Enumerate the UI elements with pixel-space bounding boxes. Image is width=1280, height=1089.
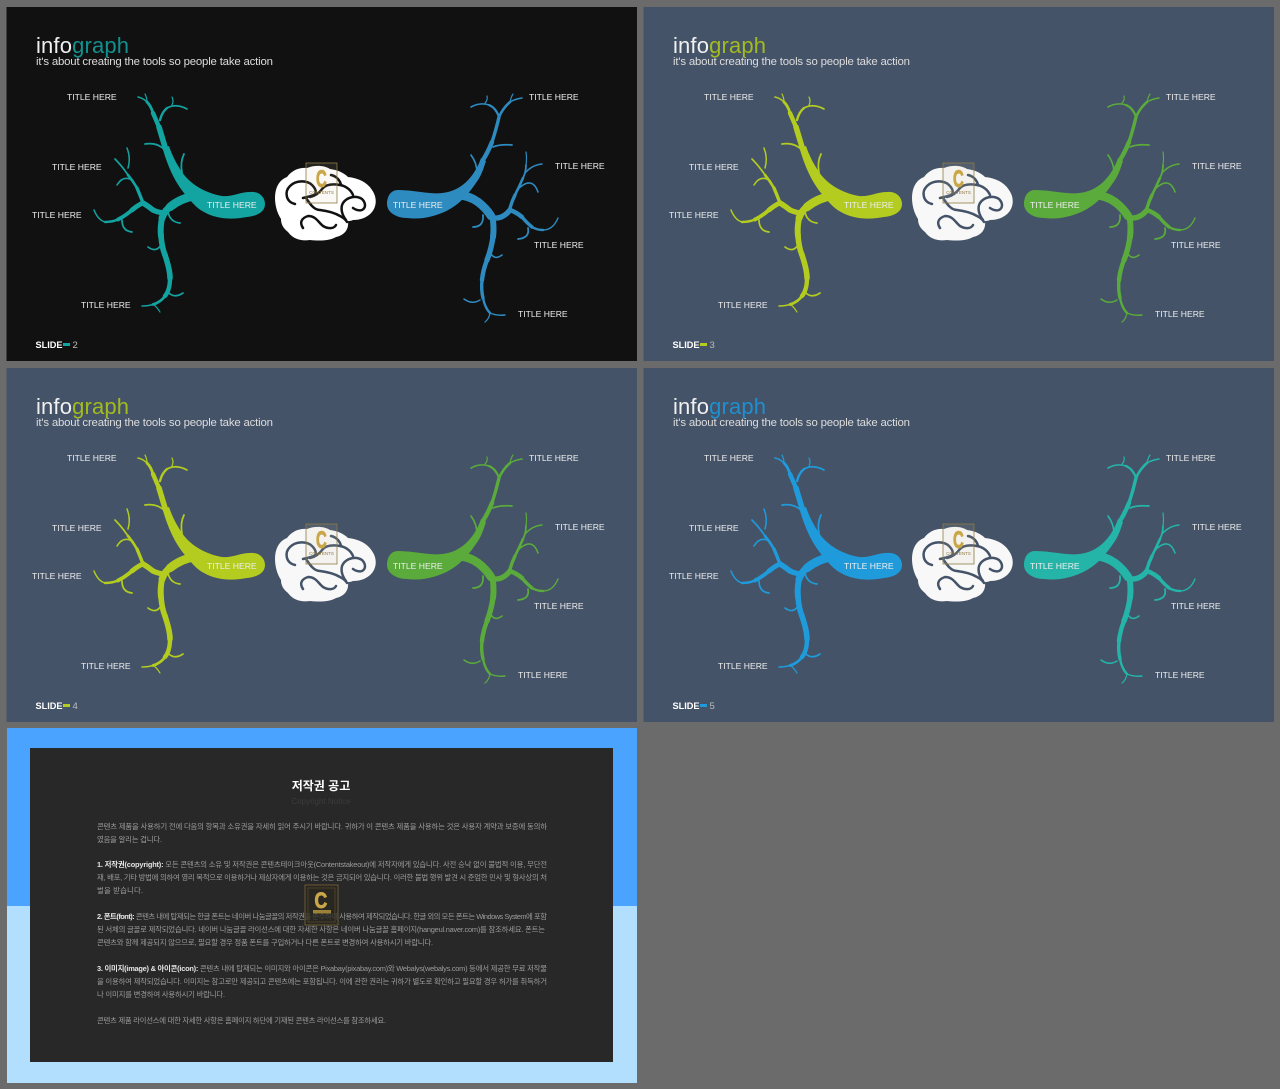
text block: copyright: 1. 저작권(copyright): 모든 콘텐츠의 소유 및 저작권은 콘텐츠테이크아웃(Contentstakeout)에 저작자에게 있습니다. 사전 승낙 없이 불법적 이용, 무단전 [97,860,547,869]
labels: right titles: TITLE HERE [393,200,443,210]
icon: brain [275,166,376,241]
watermark badge [943,163,974,203]
labels: right titles: TITLE HERE [1030,200,1080,210]
watermark badge: C [953,528,964,554]
heading: infograph: infograph [673,33,766,58]
text block: copyright: 재, 배포, 기타 방법에 의하여 영리 목적으로 이용하거나 제삼자에게 이용하는 것은 금지되어 있습니다. 이러한 불법 행위 발견 시 준엄한 민사 및 형사상의 처 [97,873,547,882]
text block: copyright: 벌을 받습니다. [97,886,143,895]
slide number: 5 [710,701,715,712]
labels: right titles: TITLE HERE [529,92,579,102]
labels: left titles [32,453,257,671]
labels: left titles: TITLE HERE [689,162,739,172]
panel: copyright notice slide [7,728,637,1083]
text block: image and icon: 을 이용하여 제작되었습니다. 이미지는 참고로만 제공되고 콘텐츠에는 포함됩니다. 이에 관한 권리는 귀하가 별도로 확인하고 필요할 경우 허가를 취득하거 [97,977,547,986]
labels: left titles: TITLE HERE [704,453,754,463]
slide number: SLIDE [672,340,700,350]
watermark badge: C [316,528,327,554]
chart: right branch tree [387,94,558,322]
labels: left titles [32,92,257,310]
text block: font: 2. 폰트(font): 콘텐츠 내에 탑재되는 한글 폰트는 네이버 나눔글꼴의 저작권을 준수하여 사용하여 제작되었습니다. 한글 외의 모든 폰트는 Windows System에 포함 [97,912,547,921]
text block: image and icon: 나 이미지를 변경하여 사용하시기 바랍니다. [97,990,225,999]
labels: left titles: TITLE HERE [844,200,894,210]
labels: left titles: TITLE HERE [669,210,719,220]
subheading: copyright notice: Copyright Notice [291,797,351,806]
labels: left titles: TITLE HERE [704,92,754,102]
labels: left titles: TITLE HERE [67,92,117,102]
labels: right titles: TITLE HERE [555,522,605,532]
text block: image and icon: 3. 이미지(image) & 아이콘(icon): 콘텐츠 내에 탑재되는 이미지와 아이콘은 Pixabay(pixabay.com)와 Webalys(webalys.com) 등에서 제공한 무료 저작물 [97,964,547,973]
labels: right titles [393,92,605,319]
heading: infograph: infograph [673,394,766,419]
slide number: SLIDE [36,701,63,711]
text block: introduction [97,822,547,844]
chart: right branch tree [1024,94,1195,322]
panel: slide 4, lime on slate [6,368,637,722]
slide number: 2 [72,340,78,351]
slide number: SLIDE [36,340,63,350]
labels: right titles: TITLE HERE [518,670,568,680]
subtitle: it's about creating the tools so people take action [36,56,273,68]
labels: left titles [669,92,894,310]
text block: image and icon [97,964,547,999]
labels: left titles: TITLE HERE [718,300,768,310]
heading: infograph: infograph [36,394,129,419]
slide number: SLIDE [672,701,700,711]
text block: font: 콘텐츠와 함께 제공되지 않으므로, 필요할 경우 정품 폰트를 구입하거나 다른 폰트로 변경하여 사용하시기 바랍니다. [97,938,433,947]
icon: brain [912,527,1013,602]
slide number [36,340,78,351]
labels: right titles: TITLE HERE [1166,453,1216,463]
text block: font [97,912,547,947]
labels: left titles: TITLE HERE [689,523,739,533]
labels: right titles: TITLE HERE [555,161,605,171]
panel: slide 3, lime on slate [644,7,1274,361]
slide number: 4 [72,701,78,712]
labels: right titles: TITLE HERE [534,240,584,250]
labels: right titles: TITLE HERE [529,453,579,463]
chart: right branch tree [1024,455,1195,683]
labels: right titles: TITLE HERE [1030,561,1080,571]
watermark badge [306,524,337,564]
icon: brain [275,527,376,602]
text block: introduction: 였음을 알리는 겁니다. [97,835,162,844]
slide number: 3 [710,340,715,351]
labels: right titles [1030,453,1242,680]
labels: left titles: TITLE HERE [67,453,117,463]
labels: right titles: TITLE HERE [1171,240,1221,250]
icon: brain [912,166,1013,241]
labels: right titles: TITLE HERE [393,561,443,571]
watermark badge: CONTENTS [309,551,334,556]
labels: right titles: TITLE HERE [1155,309,1205,319]
labels: left titles: TITLE HERE [207,200,257,210]
text block: font: 된 서체의 글꼴로 제작되었습니다. 네이버 나눔글꼴 라이선스에 대한 자세한 사항은 네이버 나눔글꼴 홈페이지(hangeul.naver.com)를 참조하세요. 폰트는 [97,925,545,934]
subtitle: it's about creating the tools so people take action [36,417,273,429]
slide number [672,340,715,351]
labels: right titles: TITLE HERE [1192,522,1242,532]
watermark badge: CONTENTS [946,190,971,195]
labels: right titles [1030,92,1242,319]
labels: left titles: TITLE HERE [32,210,82,220]
chart: left branch tree [731,455,902,673]
labels: left titles: TITLE HERE [844,561,894,571]
subtitle: it's about creating the tools so people take action [673,56,910,68]
labels: left titles: TITLE HERE [207,561,257,571]
panel: slide 5, blue on slate [644,368,1274,722]
labels: right titles: TITLE HERE [518,309,568,319]
heading: copyright notice: 저작권 공고 [292,778,350,793]
slide number [36,701,78,712]
watermark badge: C [316,167,327,193]
labels: left titles: TITLE HERE [32,571,82,581]
watermark badge: C [953,167,964,193]
chart: left branch tree [94,94,265,312]
labels: right titles: TITLE HERE [1166,92,1216,102]
heading: infograph: infograph [36,33,129,58]
watermark badge: CONTENTS [946,551,971,556]
text block: introduction: 콘텐츠 제품을 사용하기 전에 다음의 항목과 소유권을 자세히 읽어 주시기 바랍니다. 귀하가 이 콘텐츠 제품을 사용하는 것은 사용자 계약과 보증에 동의하 [97,822,547,831]
slide number [672,701,715,712]
labels: left titles: TITLE HERE [718,661,768,671]
labels: right titles: TITLE HERE [1171,601,1221,611]
watermark badge: CONTENTS [309,190,334,195]
subtitle: it's about creating the tools so people take action [673,417,910,429]
labels: left titles: TITLE HERE [81,300,131,310]
chart: right branch tree [387,455,558,683]
watermark badge [306,163,337,203]
text block: license note: 콘텐츠 제품 라이선스에 대한 자세한 사항은 홈페이지 하단에 기재된 콘텐츠 라이선스를 참조하세요. [97,1016,386,1025]
chart: left branch tree [94,455,265,673]
labels: left titles [669,453,894,671]
labels: left titles: TITLE HERE [81,661,131,671]
panel: slide 2, black [6,7,637,361]
chart: left branch tree [731,94,902,312]
labels: right titles [393,453,605,680]
watermark badge [943,524,974,564]
labels: right titles: TITLE HERE [1192,161,1242,171]
labels: left titles: TITLE HERE [669,571,719,581]
labels: right titles: TITLE HERE [1155,670,1205,680]
labels: left titles: TITLE HERE [52,523,102,533]
labels: left titles: TITLE HERE [52,162,102,172]
watermark badge [305,885,338,925]
text block: copyright [97,860,547,895]
watermark badge: C [314,889,327,914]
labels: right titles: TITLE HERE [534,601,584,611]
